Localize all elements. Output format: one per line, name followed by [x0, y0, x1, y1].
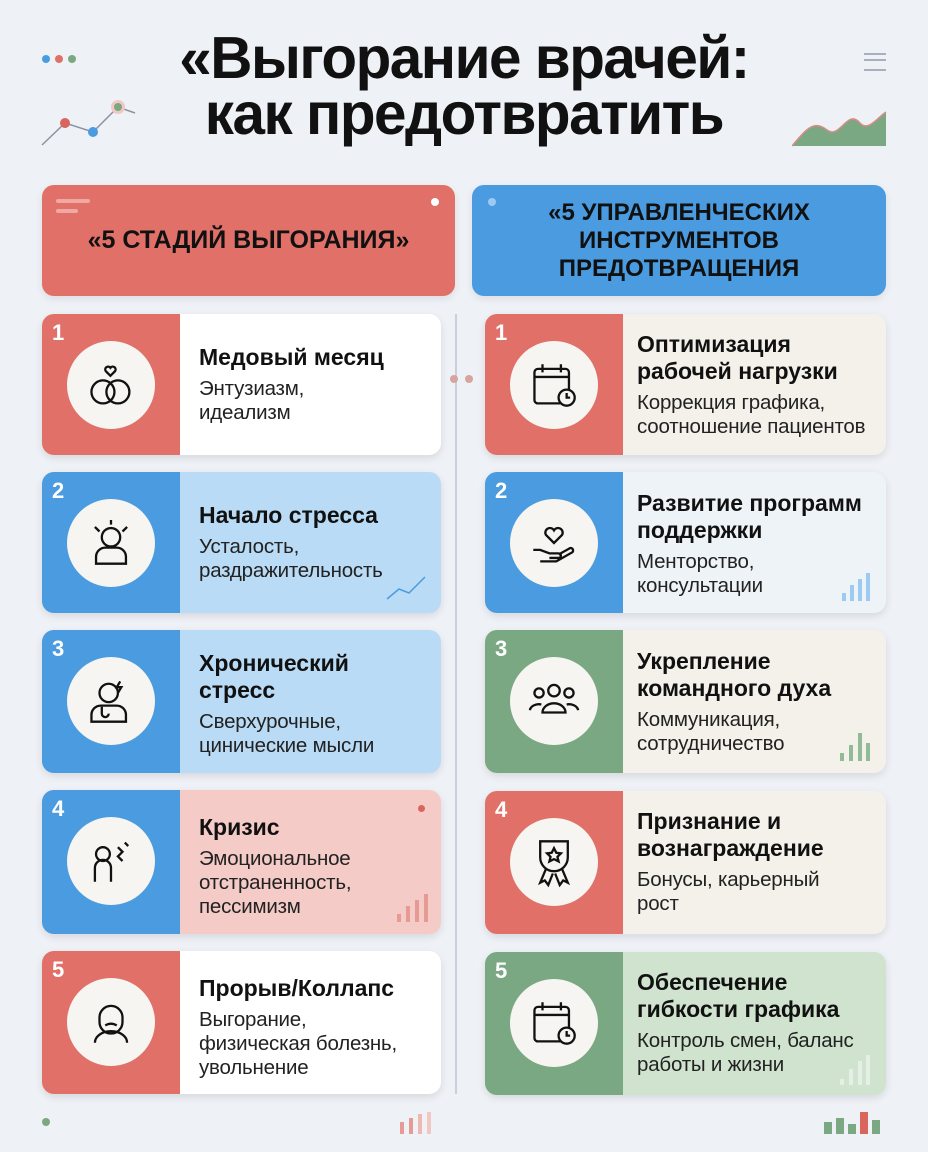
card: tool 1: 1 — [495, 320, 507, 345]
title — [179, 25, 749, 147]
card: stage 3: Хронический — [199, 650, 349, 676]
card: stage 5: 5 — [52, 957, 64, 982]
card: tool 2: 2 — [495, 478, 507, 503]
card: tool 2: консультации — [637, 574, 763, 597]
card: stage 5: Выгорание, — [199, 1008, 307, 1031]
title: «Выгорание врачей: — [179, 25, 749, 91]
card: tool 4 — [485, 791, 886, 934]
card: stage 5: физическая болезнь, — [199, 1032, 397, 1055]
card: stage 2: Усталость, — [199, 535, 299, 558]
decorative dots — [42, 55, 76, 63]
card: stage 1: идеализм — [199, 401, 291, 424]
icon: calendar clock — [510, 341, 598, 429]
card: stage 5 — [42, 951, 441, 1094]
icon: menu — [864, 53, 886, 71]
card: tool 3: Укрепление — [637, 648, 771, 674]
card: tool 2: Развитие программ — [637, 490, 862, 516]
card: tool 5: гибкости графика — [637, 996, 839, 1022]
icon: line chart left — [42, 100, 136, 146]
card: tool 5 — [485, 952, 886, 1095]
card: stage 2: 2 — [52, 478, 64, 503]
card: tool 3: командного духа — [637, 675, 831, 701]
card: tool 1: Оптимизация — [637, 331, 791, 357]
icon: hand heart — [510, 499, 598, 587]
icon: person — [67, 978, 155, 1066]
card: stage 3: 3 — [52, 636, 64, 661]
icon: award — [510, 818, 598, 906]
panel header: tools — [472, 185, 886, 296]
card: stage 1: Энтузиазм, — [199, 377, 304, 400]
panel header: tools: «5 УПРАВЛЕНЧЕСКИХ — [548, 198, 810, 226]
card: tool 4: Бонусы, карьерный — [637, 868, 819, 891]
divider line — [455, 314, 457, 1094]
card: tool 1: Коррекция графика, — [637, 391, 825, 414]
icon: stressed person — [67, 499, 155, 587]
card: stage 4 — [42, 790, 441, 934]
card: stage 3 — [42, 630, 441, 773]
card: stage 3: стресс — [199, 677, 275, 703]
card: stage 1: 1 — [52, 320, 64, 345]
card: stage 2: Начало стресса — [199, 502, 378, 528]
card: stage 2 — [42, 472, 441, 613]
card: tool 2: поддержки — [637, 517, 762, 543]
card: tool 4: вознаграждение — [637, 835, 824, 861]
card: stage 4: Эмоциональное — [199, 847, 350, 870]
icon: person crisis — [67, 817, 155, 905]
card: stage 1: Медовый месяц — [199, 344, 384, 370]
card: stage 2: раздражительность — [199, 559, 383, 582]
card: tool 5: Обеспечение — [637, 969, 787, 995]
panel header: tools: ПРЕДОТВРАЩЕНИЯ — [559, 254, 799, 282]
card: stage 5: Прорыв/Коллапс — [199, 975, 394, 1001]
card: tool 4: рост — [637, 892, 679, 915]
icon: area chart — [792, 112, 886, 146]
icon: calendar clock — [510, 979, 598, 1067]
card: stage 3: Сверхурочные, — [199, 710, 341, 733]
card: tool 1: рабочей нагрузки — [637, 358, 838, 384]
card: tool 5: Контроль смен, баланс — [637, 1029, 854, 1052]
card: tool 1: соотношение пациентов — [637, 415, 865, 438]
panel header: stages: «5 СТАДИЙ ВЫГОРАНИЯ» — [88, 226, 409, 254]
card: tool 4: Признание и — [637, 808, 781, 834]
card: stage 4: 4 — [52, 796, 64, 821]
card: tool 5: работы и жизни — [637, 1053, 784, 1076]
card: tool 2 — [485, 472, 886, 613]
panel header: tools: ИНСТРУМЕНТОВ — [579, 226, 779, 254]
card: tool 4: 4 — [495, 797, 507, 822]
icon: rings — [67, 341, 155, 429]
title: как предотвратить — [205, 81, 723, 147]
panel header: stages — [42, 185, 455, 296]
card: stage 4: пессимизм — [199, 895, 301, 918]
card: tool 5: 5 — [495, 958, 507, 983]
card: stage 5: увольнение — [199, 1056, 308, 1079]
card: tool 3: Коммуникация, — [637, 708, 780, 731]
card: stage 1 — [42, 314, 441, 455]
icon: team — [510, 657, 598, 745]
icon: doctor — [67, 657, 155, 745]
card: tool 1 — [485, 314, 886, 455]
card: stage 4: отстраненность, — [199, 871, 351, 894]
card: tool 3 — [485, 630, 886, 773]
footer decorations — [42, 1118, 50, 1126]
card: tool 3: 3 — [495, 636, 507, 661]
card: tool 2: Менторство, — [637, 550, 754, 573]
card: stage 3: цинические мысли — [199, 734, 374, 757]
card: tool 3: сотрудничество — [637, 732, 784, 755]
card: stage 4: Кризис — [199, 814, 280, 840]
